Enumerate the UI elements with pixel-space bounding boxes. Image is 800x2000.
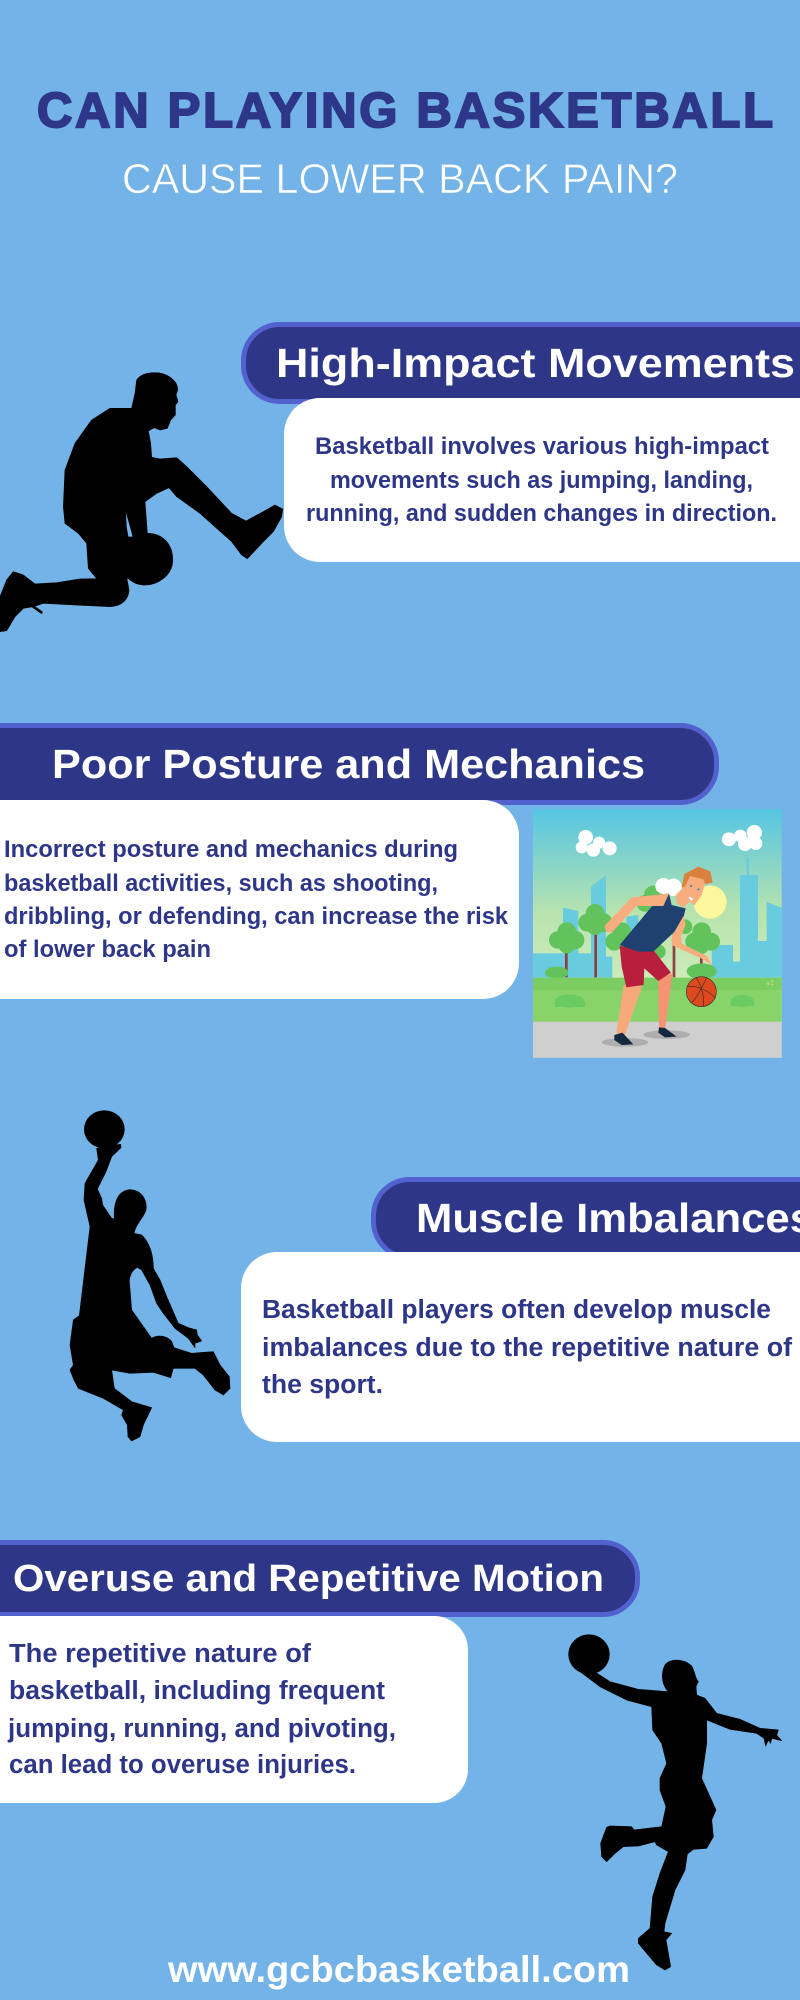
heading banner: high-impact movements <box>244 324 800 402</box>
text card: overuse and repetitive motion <box>0 1616 468 1803</box>
heading banner: poor posture and mechanics: Poor Posture and Mechanics <box>52 741 645 787</box>
title: CAN PLAYING BASKETBALL <box>37 84 773 138</box>
text card: poor posture and mechanics: of lower back pain <box>4 936 211 963</box>
heading banner: muscle imbalances: Muscle Imbalances <box>416 1195 800 1241</box>
text card: poor posture and mechanics: basketball activities, such as shooting, <box>4 870 438 897</box>
text card: overuse and repetitive motion: jumping, running, and pivoting, <box>7 1715 396 1743</box>
trees <box>545 878 720 979</box>
text card: high-impact movements: movements such as jumping, landing, <box>330 467 753 494</box>
player <box>604 867 713 1045</box>
text card: overuse and repetitive motion: can lead to overuse injuries. <box>9 1751 356 1779</box>
buildings skyline <box>533 857 782 978</box>
text card: overuse and repetitive motion: basketball, including frequent <box>9 1677 386 1705</box>
section: muscle imbalances <box>241 1180 800 1442</box>
text card: high-impact movements: Basketball involves various high-impact <box>315 433 769 460</box>
section: overuse and repetitive motion <box>0 1542 638 1803</box>
text card: muscle imbalances <box>241 1252 800 1442</box>
text card: poor posture and mechanics <box>0 800 519 999</box>
text card: poor posture and mechanics: dribbling, or defending, can increase the risk <box>4 903 509 930</box>
text card: muscle imbalances: the sport. <box>262 1371 383 1399</box>
silhouette: player reaching up with ball <box>70 1110 230 1441</box>
heading banner: poor posture and mechanics <box>0 726 716 802</box>
footer url: www.gcbcbasketball.com <box>167 1949 630 1990</box>
text card: poor posture and mechanics: Incorrect posture and mechanics during <box>4 836 458 863</box>
grass <box>533 978 782 1022</box>
section: poor posture and mechanics <box>0 726 716 999</box>
text card: overuse and repetitive motion: The repetitive nature of <box>9 1640 312 1668</box>
illustration: player dribbling in a park <box>533 809 782 1058</box>
text card: high-impact movements: running, and sudden changes in direction. <box>306 500 777 527</box>
ground <box>533 1022 782 1058</box>
icon: clouds <box>576 825 762 857</box>
title <box>37 84 773 202</box>
icon: basketball <box>686 977 716 1007</box>
text card: muscle imbalances: Basketball players often develop muscle <box>262 1296 771 1324</box>
heading banner: high-impact movements: High-Impact Movements <box>276 340 795 386</box>
heading banner: muscle imbalances <box>374 1180 800 1258</box>
silhouette: player crouching with ball <box>0 373 283 632</box>
heading banner: overuse and repetitive motion <box>0 1542 638 1614</box>
sun <box>693 885 727 919</box>
text card: high-impact movements <box>284 398 800 562</box>
heading banner: overuse and repetitive motion: Overuse and Repetitive Motion <box>13 1558 604 1600</box>
title: CAUSE LOWER BACK PAIN? <box>122 155 678 202</box>
silhouette: player leaping with ball <box>568 1634 782 1970</box>
text card: muscle imbalances: imbalances due to the repetitive nature of <box>262 1334 793 1362</box>
section: high-impact movements <box>244 324 800 562</box>
